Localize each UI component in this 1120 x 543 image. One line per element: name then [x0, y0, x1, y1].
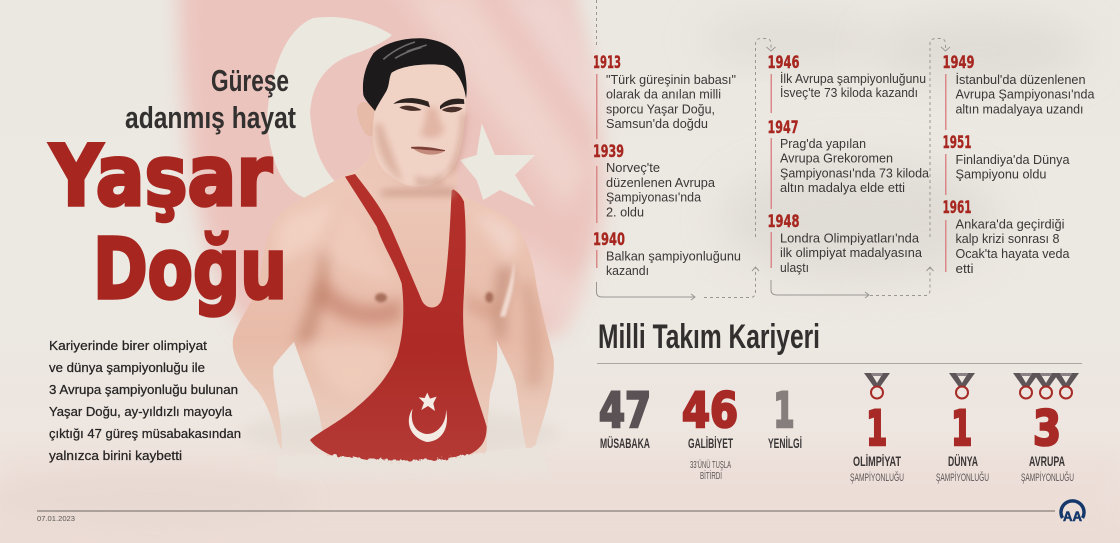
- stat: 1 yenilgi: YENİLGİ: [768, 435, 802, 451]
- muscle shading: [276, 200, 541, 397]
- 1946 entry: [768, 53, 926, 113]
- 1947 entry: Prag'da yapılan: [780, 137, 866, 151]
- hair: [363, 38, 467, 111]
- face shading: [375, 107, 466, 197]
- stat: 47 müsabaka: 47: [599, 383, 651, 439]
- stat: olimpiyat şampiyonluğu: OLİMPİYAT: [853, 453, 901, 469]
- faded lower edge: [277, 447, 557, 487]
- logo: AA: [1061, 501, 1084, 524]
- timeline column 3: [942, 53, 1095, 276]
- header: Güreşe adanmış hayat: adanmış hayat: [125, 100, 296, 135]
- ear: [357, 102, 375, 136]
- 1949 entry: 1949: [942, 53, 974, 73]
- stat: 1 yenilgi: [768, 383, 802, 451]
- 1949 entry: İstanbul'da düzenlenen: [956, 73, 1086, 87]
- stat: olimpiyat şampiyonluğu: 1: [866, 401, 887, 457]
- section rule: [597, 363, 1082, 364]
- stat: dünya şampiyonluğu: DÜNYA: [948, 453, 978, 469]
- portrait: Yaşar Doğu: [233, 38, 560, 487]
- flag star: [460, 123, 535, 207]
- stat: 46 galibiyet: BİTİRDİ: [700, 469, 722, 482]
- 1940 entry: [593, 230, 741, 278]
- flag folds: [400, 0, 605, 330]
- stat: olimpiyat şampiyonluğu: ŞAMPİYONLUĞU: [850, 471, 904, 484]
- 1947 entry: Avrupa Grekoromen: [780, 152, 893, 166]
- 1913 entry: "Türk güreşinin babası": [606, 73, 736, 87]
- 1939 entry: Şampiyonası'nda: [606, 190, 701, 204]
- 1947 entry: [768, 118, 929, 209]
- 1961 entry: [942, 198, 1070, 276]
- icon: three medals: [1013, 373, 1079, 398]
- 1940 entry: Balkan şampiyonluğunu: [606, 250, 741, 264]
- 1913 entry: Samsun'da doğdu: [606, 117, 708, 131]
- stat: dünya şampiyonluğu: [936, 373, 989, 484]
- 1948 entry: [768, 212, 922, 275]
- nipples: [375, 293, 387, 302]
- header: Güreşe adanmış hayat: Güreşe: [211, 63, 289, 98]
- name: Yaşar Doğu: Doğu: [93, 220, 287, 318]
- body skin: [233, 160, 554, 460]
- 1951 entry: [942, 133, 1070, 195]
- 1949 entry: [942, 53, 1095, 130]
- head: [355, 38, 467, 200]
- 1951 entry: Finlandiya'da Dünya: [956, 153, 1070, 167]
- neck: [355, 137, 457, 200]
- flag field: [178, 0, 602, 335]
- 1947 entry: altın madalya elde etti: [780, 181, 905, 195]
- header: Güreşe adanmış hayat: [125, 63, 296, 135]
- 1946 entry: 1946: [768, 53, 800, 73]
- biography paragraph: [49, 339, 241, 463]
- singlet crescent: [409, 409, 447, 442]
- eyebrows: [393, 98, 464, 109]
- 1947 entry: Şampiyonası'nda 73 kiloda: [780, 166, 929, 180]
- 1951 entry: 1951: [942, 133, 972, 153]
- stat: avrupa şampiyonluğu: ŞAMPİYONLUĞU: [1021, 471, 1074, 484]
- 1961 entry: kalp krizi sonrası 8: [956, 232, 1060, 246]
- face: [373, 64, 466, 187]
- icon: medal: [949, 373, 975, 398]
- arm highlight: [500, 262, 514, 317]
- 1961 entry: 1961: [942, 198, 972, 218]
- 1947 entry: 1947: [768, 118, 798, 138]
- date: 07.01.2023: [37, 514, 75, 523]
- 1948 entry: ilk olimpiyat madalyasına: [780, 246, 922, 260]
- name: Yaşar Doğu: [49, 127, 287, 318]
- 1939 entry: 2. oldu: [606, 206, 644, 220]
- biography paragraph: yalnızca birini kaybetti: [49, 449, 182, 463]
- stat: 46 galibiyet: 46: [682, 383, 738, 439]
- heading: Milli Takım Kariyeri: Milli Takım Kariyeri: [598, 318, 820, 356]
- timeline column 2: [768, 53, 929, 275]
- icon: medal: [864, 373, 890, 398]
- 1913 entry: sporcu Yaşar Doğu,: [606, 102, 715, 116]
- stat: avrupa şampiyonluğu: AVRUPA: [1029, 453, 1065, 469]
- stat: 47 müsabaka: [599, 383, 651, 451]
- 1940 entry: 1940: [593, 230, 625, 250]
- 1939 entry: 1939: [593, 142, 624, 162]
- 1961 entry: Ankara'da geçirdiği: [956, 218, 1064, 232]
- 1913 entry: [593, 53, 736, 139]
- biography paragraph: Yaşar Doğu, ay-yıldızlı mayoyla: [49, 405, 232, 419]
- 1939 entry: düzenlenen Avrupa: [606, 176, 715, 190]
- stat: olimpiyat şampiyonluğu: [850, 373, 904, 484]
- 1949 entry: Avrupa Şampiyonası'nda: [956, 88, 1095, 102]
- mouth: [412, 147, 445, 155]
- 1951 entry: Şampiyonu oldu: [956, 168, 1047, 182]
- 1948 entry: 1948: [768, 212, 800, 232]
- stat: avrupa şampiyonluğu: 3: [1033, 401, 1061, 457]
- 1948 entry: Londra Olimpiyatları'nda: [780, 232, 919, 246]
- 1946 entry: İlk Avrupa şampiyonluğunu: [780, 72, 926, 86]
- stat: 1 yenilgi: 1: [774, 383, 794, 439]
- flag crescent: [267, 17, 400, 240]
- biography paragraph: 3 Avrupa şampiyonluğu bulunan: [49, 383, 238, 397]
- stat: 47 müsabaka: MÜSABAKA: [600, 435, 650, 451]
- red wrestling singlet: [310, 174, 487, 464]
- stat: avrupa şampiyonluğu: [1013, 373, 1079, 484]
- eyes: [399, 106, 463, 112]
- 1913 entry: 1913: [593, 53, 621, 73]
- biography paragraph: Kariyerinde birer olimpiyat: [49, 339, 208, 353]
- timeline column 1: [593, 53, 741, 278]
- stat: 46 galibiyet: [682, 383, 738, 482]
- singlet star: [419, 393, 437, 411]
- stat: dünya şampiyonluğu: 1: [951, 401, 972, 457]
- footer rule: [37, 510, 1055, 512]
- 1948 entry: ulaştı: [780, 261, 809, 275]
- torso: [233, 160, 560, 487]
- stat: 46 galibiyet: GALİBİYET: [688, 435, 733, 451]
- Turkish flag background: [178, 0, 605, 335]
- stat: 46 galibiyet: 33'ÜNÜ TUŞLA: [690, 459, 731, 471]
- soft wash under portrait: [240, 407, 560, 460]
- 1961 entry: etti: [956, 262, 974, 276]
- 1949 entry: altın madalyaya uzandı: [956, 102, 1084, 116]
- name: Yaşar Doğu: Yaşar: [49, 127, 272, 225]
- stat: dünya şampiyonluğu: ŞAMPİYONLUĞU: [936, 471, 989, 484]
- 1939 entry: Norveç'te: [606, 161, 660, 175]
- biography paragraph: çıktığı 47 güreş müsabakasından: [49, 427, 241, 441]
- hair highlight: [383, 42, 427, 59]
- 1940 entry: kazandı: [606, 264, 649, 278]
- logo: AA: AA: [1063, 508, 1082, 524]
- biography paragraph: ve dünya şampiyonluğu ile: [49, 361, 205, 375]
- 1961 entry: Ocak'ta hayata veda: [956, 247, 1070, 261]
- 1939 entry: [593, 142, 715, 223]
- 1913 entry: olarak da anılan milli: [606, 88, 721, 102]
- timeline connector dashes: [596, 0, 950, 300]
- 1946 entry: İsveç'te 73 kiloda kazandı: [780, 86, 918, 100]
